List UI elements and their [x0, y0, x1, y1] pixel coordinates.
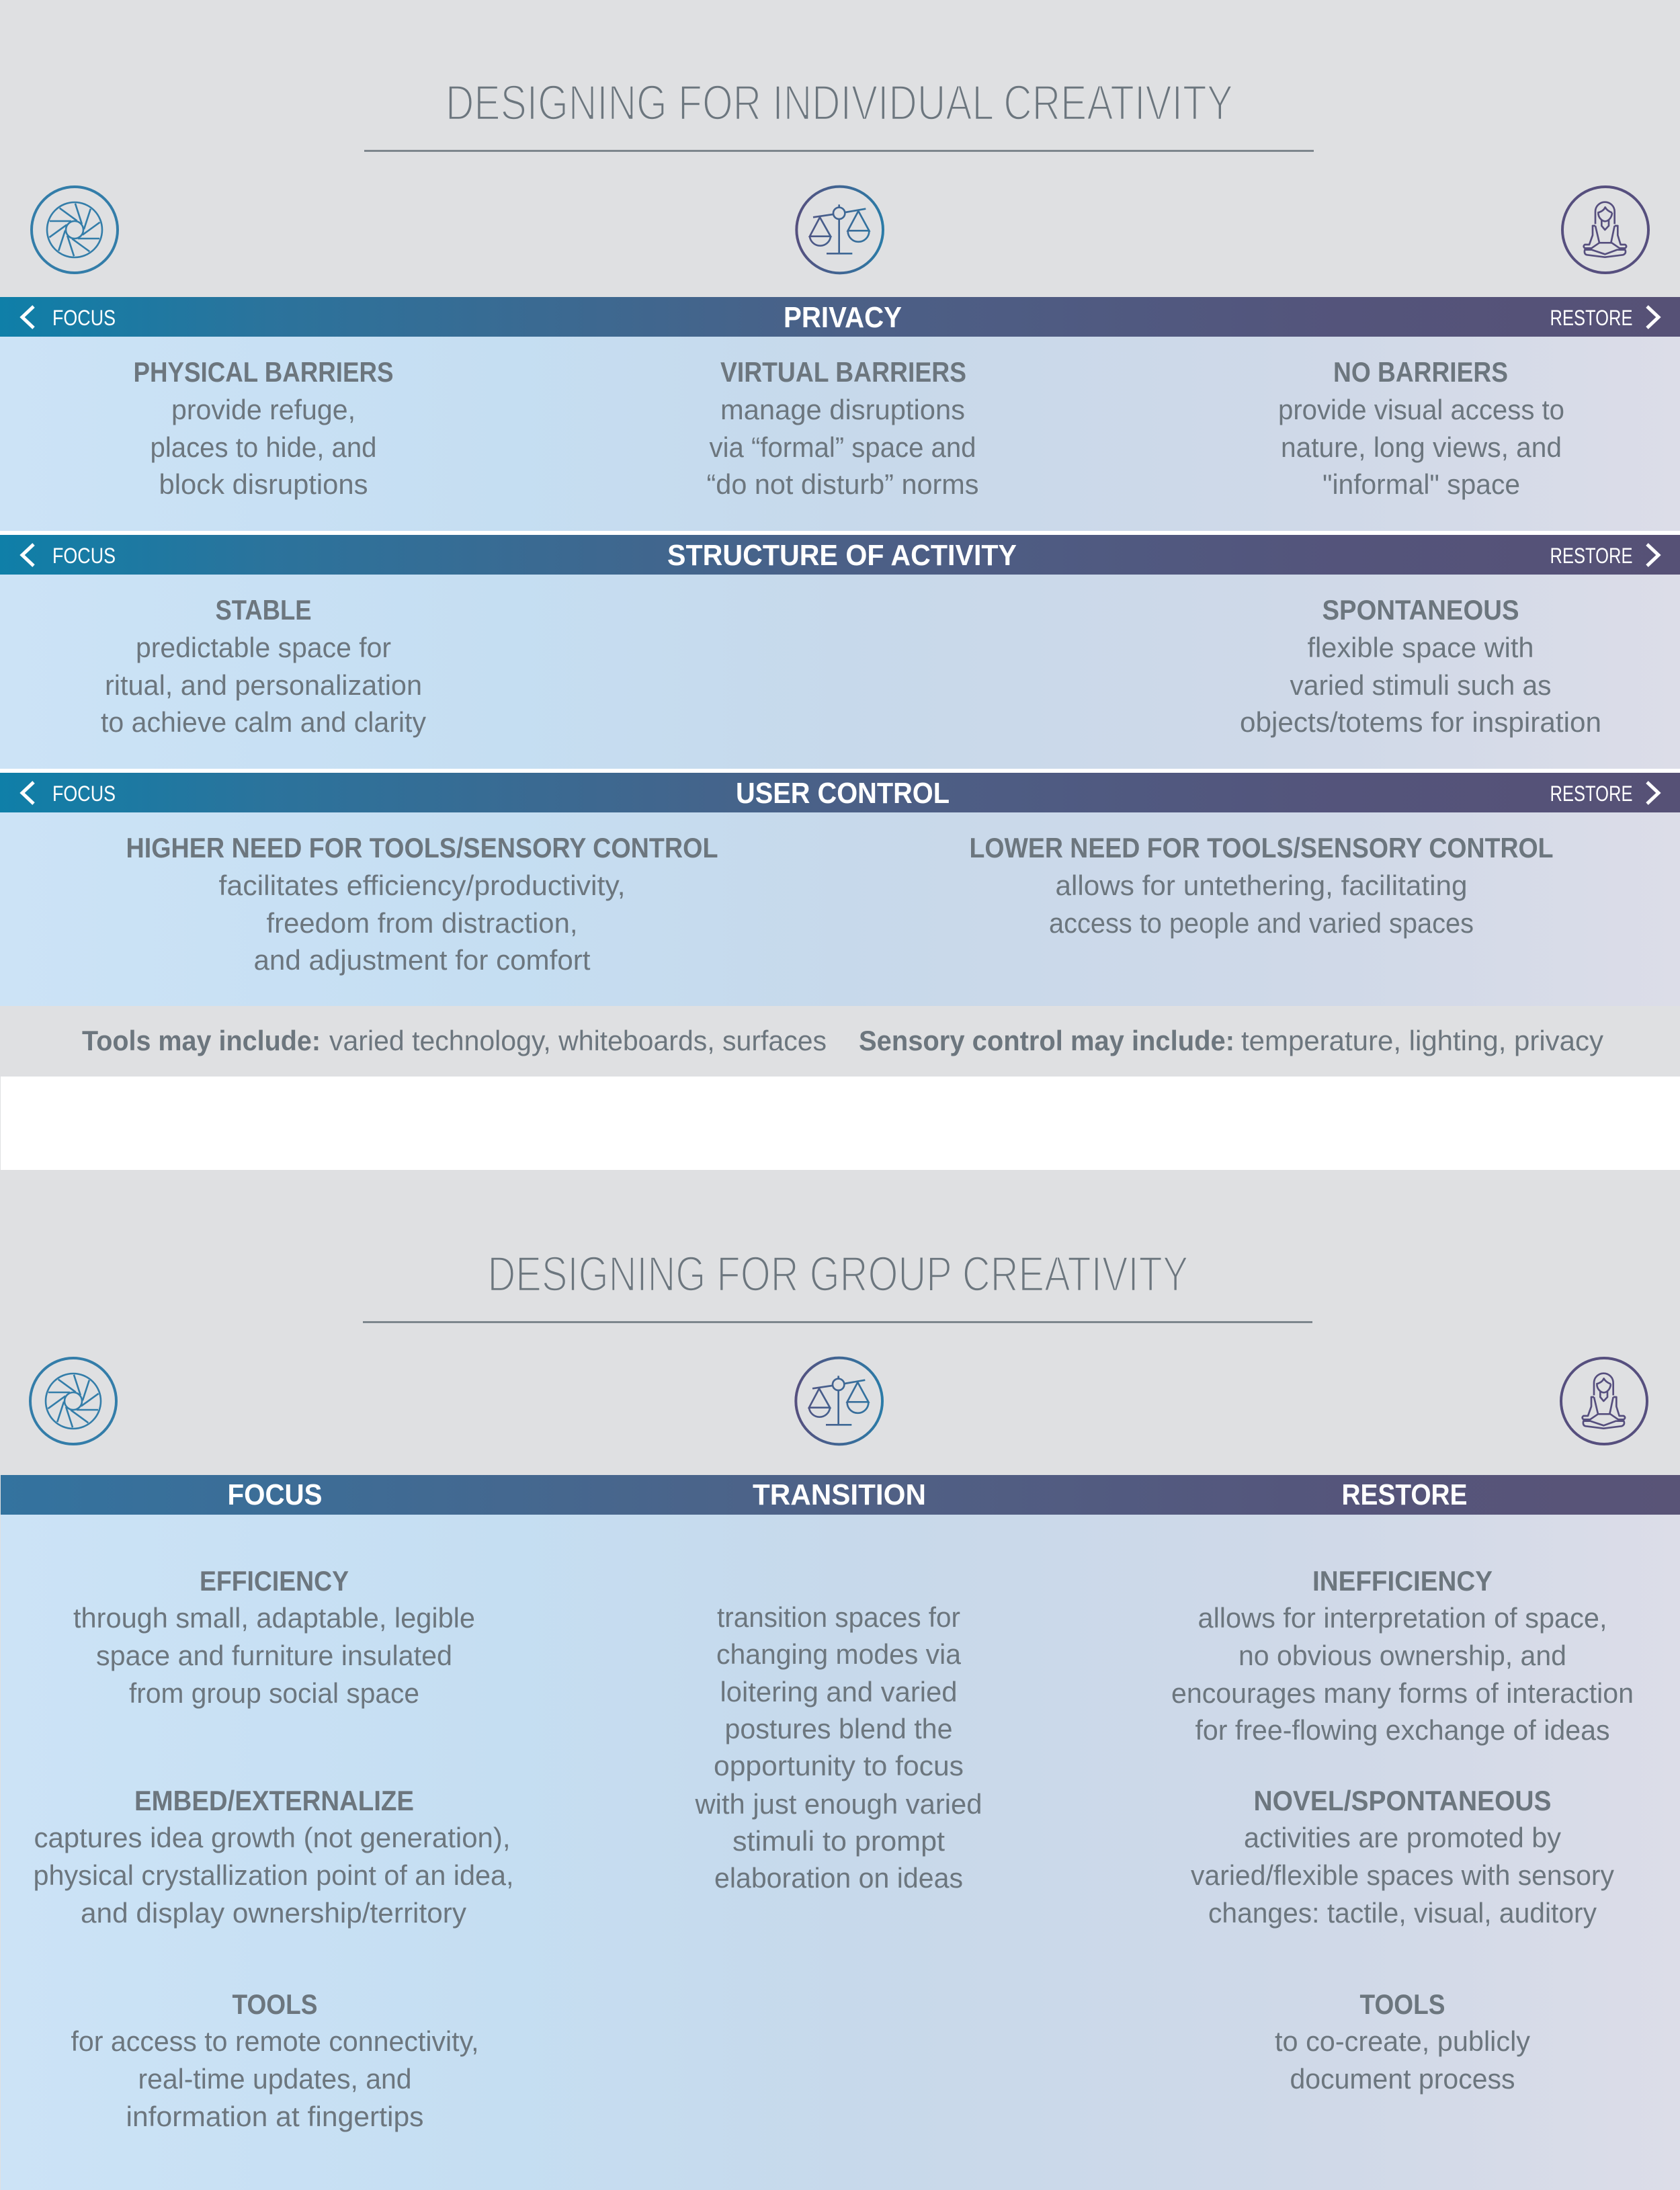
column: transition: postures blend the [724, 1713, 953, 1744]
spontaneous: SPONTANEOUS [1322, 594, 1519, 626]
inefficiency: no obvious ownership, and [1238, 1640, 1566, 1671]
tools: document process [1290, 2063, 1515, 2095]
band: focus, transition, restore: TRANSITION [753, 1478, 926, 1511]
tools: TOOLS [233, 1988, 317, 2020]
column: transition: elaboration on ideas [714, 1862, 963, 1894]
inefficiency: for free-flowing exchange of ideas [1195, 1714, 1610, 1746]
novel/spontaneous: varied/flexible spaces with sensory [1191, 1859, 1614, 1891]
higher need: freedom from distraction, [266, 907, 578, 939]
spontaneous: flexible space with [1308, 632, 1534, 663]
column: transition [695, 1601, 982, 1894]
column: restore [1171, 1565, 1634, 2095]
stable: ritual, and personalization [105, 669, 422, 701]
band: structure of activity [0, 535, 1680, 575]
band title: USER CONTROL [736, 777, 950, 810]
lower need: allows for untethering, facilitating [1055, 870, 1468, 901]
restore arrow [1647, 544, 1658, 566]
higher need: and adjustment for comfort [254, 944, 591, 976]
note: tools and sensory control: Sensory control may include: [859, 1025, 1234, 1056]
band: structure of activity: RESTORE [1550, 544, 1633, 568]
stable: predictable space for [136, 632, 391, 663]
embed/externalize [34, 1785, 513, 1929]
panel: user control [0, 812, 1680, 1006]
spontaneous: varied stimuli such as [1290, 669, 1551, 701]
icon: balance scales [796, 187, 883, 273]
physical barriers: block disruptions [159, 468, 368, 500]
column: transition: changing modes via [716, 1638, 962, 1670]
physical barriers [133, 356, 394, 500]
column: transition: with just enough varied [695, 1788, 982, 1820]
focus arrow [22, 544, 34, 566]
stable [101, 594, 426, 738]
inefficiency: INEFFICIENCY [1312, 1565, 1493, 1597]
tools: real-time updates, and [138, 2063, 411, 2095]
restore arrow [1647, 306, 1658, 328]
white divider [1, 1077, 1680, 1170]
embed/externalize: physical crystallization point of an idea, [34, 1859, 513, 1891]
panel: group spaces [1, 1515, 1680, 2190]
restore arrow [1647, 782, 1658, 804]
efficiency: space and furniture insulated [96, 1640, 452, 1671]
tools: to co-create, publicly [1275, 2025, 1530, 2057]
novel/spontaneous: activities are promoted by [1244, 1822, 1561, 1853]
band: privacy: FOCUS [52, 306, 116, 330]
no barriers: "informal" space [1322, 468, 1520, 500]
icon: balance scales [796, 1358, 882, 1444]
embed/externalize: and display ownership/territory [81, 1897, 466, 1929]
no barriers [1278, 356, 1564, 500]
virtual barriers [707, 356, 978, 500]
band: user control: FOCUS [52, 782, 116, 806]
embed/externalize: EMBED/EXTERNALIZE [134, 1785, 414, 1816]
lower need [969, 832, 1554, 939]
no barriers: nature, long views, and [1281, 431, 1562, 463]
efficiency: EFFICIENCY [200, 1565, 349, 1597]
virtual barriers: via “formal” space and [710, 431, 976, 463]
stable: to achieve calm and clarity [101, 706, 426, 738]
physical barriers: provide refuge, [171, 394, 355, 425]
band: user control [0, 773, 1680, 812]
novel/spontaneous: changes: tactile, visual, auditory [1208, 1897, 1597, 1929]
efficiency: through small, adaptable, legible [73, 1602, 475, 1634]
column: transition: transition spaces for [717, 1601, 960, 1633]
band title: PRIVACY [784, 301, 902, 334]
title: individual creativity: DESIGNING FOR INDIVIDUAL CREATIVITY [446, 76, 1233, 130]
column: transition: loitering and varied [720, 1676, 957, 1708]
spontaneous [1240, 594, 1601, 738]
lower need: LOWER NEED FOR TOOLS/SENSORY CONTROL [969, 832, 1554, 864]
physical barriers: places to hide, and [151, 431, 376, 463]
no barriers: provide visual access to [1278, 394, 1564, 425]
lower need: access to people and varied spaces [1049, 907, 1474, 939]
note: tools and sensory control: temperature, lighting, privacy [1241, 1025, 1603, 1056]
band: focus, transition, restore [1, 1475, 1680, 1515]
tools [71, 1988, 478, 2132]
higher need: HIGHER NEED FOR TOOLS/SENSORY CONTROL [126, 832, 718, 864]
stable: STABLE [215, 594, 312, 626]
efficiency: from group social space [129, 1677, 419, 1709]
spontaneous: objects/totems for inspiration [1240, 706, 1601, 738]
inefficiency: encourages many forms of interaction [1171, 1677, 1634, 1709]
note: tools and sensory control [82, 1025, 1603, 1056]
physical barriers: PHYSICAL BARRIERS [133, 356, 394, 388]
section: designing for group creativity [1, 1247, 1680, 2190]
novel/spontaneous [1191, 1785, 1614, 1929]
embed/externalize: captures idea growth (not generation), [34, 1822, 511, 1853]
focus arrow [22, 306, 34, 328]
panel: structure of activity [0, 575, 1680, 769]
inefficiency: allows for interpretation of space, [1198, 1602, 1607, 1634]
inefficiency [1171, 1565, 1634, 1746]
tools: for access to remote connectivity, [71, 2025, 478, 2057]
column: focus [34, 1565, 513, 2132]
note: tools and sensory control: Tools may include: [82, 1025, 321, 1056]
band: focus, transition, restore: RESTORE [1341, 1478, 1468, 1511]
title: group creativity: DESIGNING FOR GROUP CREATIVITY [488, 1247, 1188, 1302]
band: structure of activity: FOCUS [52, 544, 116, 568]
icon: aperture [32, 187, 118, 273]
icon: meditating person [1561, 1358, 1647, 1444]
section: designing for individual creativity [0, 76, 1680, 1056]
virtual barriers: “do not disturb” norms [707, 468, 978, 500]
no barriers: NO BARRIERS [1333, 356, 1508, 388]
tools [1275, 1988, 1530, 2095]
higher need: facilitates efficiency/productivity, [219, 870, 625, 901]
focus arrow [22, 782, 34, 804]
tools: information at fingertips [126, 2101, 423, 2132]
efficiency [73, 1565, 475, 1709]
note: tools and sensory control: varied technology, whiteboards, surfaces [329, 1025, 827, 1056]
band title: STRUCTURE OF ACTIVITY [667, 539, 1017, 572]
icon: aperture [30, 1358, 116, 1444]
higher need [126, 832, 718, 976]
column: transition: stimuli to prompt [732, 1825, 945, 1857]
virtual barriers: VIRTUAL BARRIERS [720, 356, 966, 388]
band: privacy: RESTORE [1550, 306, 1633, 330]
band: user control: RESTORE [1550, 782, 1633, 806]
panel: privacy [0, 337, 1680, 531]
column: transition: opportunity to focus [714, 1750, 964, 1781]
virtual barriers: manage disruptions [720, 394, 965, 425]
icon: meditating person [1562, 187, 1648, 273]
tools: TOOLS [1360, 1988, 1445, 2020]
band: focus, transition, restore: FOCUS [227, 1478, 323, 1511]
band: privacy [0, 297, 1680, 337]
novel/spontaneous: NOVEL/SPONTANEOUS [1254, 1785, 1551, 1816]
